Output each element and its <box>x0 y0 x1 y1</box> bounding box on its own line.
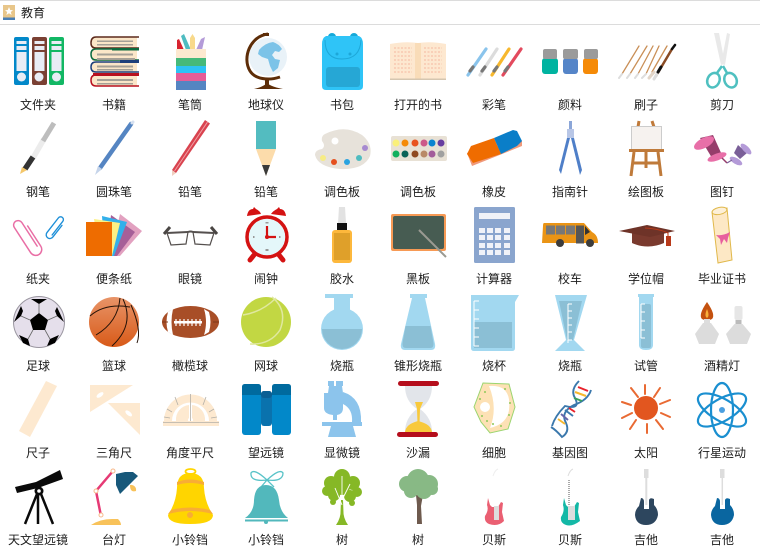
item: 贝斯 <box>482 469 506 547</box>
icon: paper clips <box>12 216 66 258</box>
item: 铅笔 <box>254 121 278 199</box>
item: 文件夹 <box>14 37 64 112</box>
item: 尺子 <box>19 381 57 460</box>
icon: measuring cylinder <box>555 295 587 351</box>
icon: yellow bell <box>168 469 213 524</box>
icon: test tube <box>638 294 654 350</box>
icon: alarm clock <box>247 207 287 260</box>
icon: microscope <box>322 381 362 437</box>
label: 烧瓶 <box>558 359 582 373</box>
item: 彩笔 <box>468 49 521 112</box>
label: 尺子 <box>26 446 50 460</box>
item: 橡皮 <box>467 130 522 199</box>
label: 篮球 <box>102 358 126 373</box>
icon: plant cell <box>474 383 515 433</box>
item: 锥形烧瓶 <box>394 294 442 373</box>
item: 酒精灯 <box>695 302 751 373</box>
item: 闹钟 <box>247 207 287 286</box>
icon: diploma scroll <box>711 206 732 263</box>
label: 橡皮 <box>482 185 506 199</box>
icon: conical flask <box>401 294 435 350</box>
item: 网球 <box>241 297 291 373</box>
label: 橄榄球 <box>172 358 208 373</box>
icon: sun <box>622 385 670 433</box>
icon: graduation cap <box>619 225 675 246</box>
label: 角度平尺 <box>166 445 214 460</box>
item: 调色板 <box>315 129 371 199</box>
icon: globe <box>247 33 287 89</box>
item: 调色板 <box>391 136 447 199</box>
icon: eraser <box>467 130 522 166</box>
icon: red pencil <box>172 120 210 176</box>
item: 刷子 <box>619 45 675 112</box>
item: 眼镜 <box>164 227 217 286</box>
label: 显微镜 <box>324 445 360 460</box>
icon: binoculars <box>242 384 291 435</box>
item: 试管 <box>634 294 658 373</box>
label: 台灯 <box>102 532 126 547</box>
label: 书包 <box>330 98 354 112</box>
icon: blue guitar <box>711 469 734 525</box>
item: 书包 <box>322 33 363 112</box>
label: 打开的书 <box>394 97 442 112</box>
item: 图钉 <box>692 133 753 199</box>
item: 打开的书 <box>390 42 446 112</box>
label: 刷子 <box>634 98 658 112</box>
icon: paint jars <box>542 49 598 74</box>
item: 地球仪 <box>247 33 287 112</box>
label: 钢笔 <box>26 184 50 199</box>
label: 网球 <box>254 359 278 373</box>
icon: calculator <box>474 207 515 263</box>
icon: blackboard <box>391 214 446 257</box>
icon: drafting compass <box>559 121 582 175</box>
item: 树 <box>322 469 362 547</box>
label: 剪刀 <box>710 97 734 112</box>
icon: round flask <box>321 294 363 350</box>
item: 校车 <box>542 223 598 286</box>
icon: backpack <box>322 33 363 90</box>
item: 计算器 <box>474 207 515 286</box>
item: 笔筒 <box>176 34 206 112</box>
item: 行星运动 <box>693 383 751 460</box>
label: 基因图 <box>552 446 588 460</box>
item: 足球 <box>14 296 64 373</box>
label: 彩笔 <box>482 97 506 112</box>
item: 望远镜 <box>242 384 291 460</box>
item: 颜料 <box>542 49 598 112</box>
label: 烧瓶 <box>330 359 354 373</box>
item: 细胞 <box>474 383 515 460</box>
item: 绘图板 <box>628 121 664 199</box>
item: 纸夹 <box>12 216 66 286</box>
icon: stack of books <box>91 37 139 86</box>
item: 烧瓶 <box>555 295 587 373</box>
label: 毕业证书 <box>698 272 746 286</box>
label: 树 <box>336 532 348 547</box>
label: 贝斯 <box>558 533 582 547</box>
label: 闹钟 <box>254 271 278 286</box>
label: 文件夹 <box>20 97 56 112</box>
label: 细胞 <box>482 446 506 460</box>
item: 太阳 <box>622 385 670 460</box>
icon: soccer ball <box>14 296 64 348</box>
icon: pink bass guitar <box>485 469 504 525</box>
label: 树 <box>412 532 424 547</box>
icon: ruler <box>19 381 57 437</box>
label: 黑板 <box>406 272 430 286</box>
item: 便条纸 <box>86 214 142 286</box>
icon: desk lamp <box>91 469 138 525</box>
item: 剪刀 <box>705 33 739 112</box>
icon: american football <box>162 306 219 338</box>
icon: open book <box>390 42 446 80</box>
icon: glue bottle <box>332 207 352 263</box>
icon: astronomical telescope <box>15 470 63 524</box>
icon: header star badge <box>3 5 15 20</box>
item: 胶水 <box>330 207 354 286</box>
icon: alcohol lamps <box>695 302 751 344</box>
icon: green tree <box>322 469 362 525</box>
icon: hourglass <box>397 381 439 437</box>
item: 小铃铛 <box>245 472 288 547</box>
item: 学位帽 <box>619 225 675 286</box>
icon: scissors <box>705 33 739 90</box>
item: 吉他 <box>710 469 734 547</box>
item: 指南针 <box>552 121 588 199</box>
item: 吉他 <box>634 469 658 547</box>
icon: pen holder <box>176 34 206 90</box>
icon: watercolor tray <box>391 136 447 161</box>
icon: DNA helix <box>551 381 591 437</box>
item: 天文望远镜 <box>8 470 68 547</box>
icon: brushes <box>619 45 675 79</box>
icon: colored pens <box>468 49 521 75</box>
icon: protractor <box>163 394 219 426</box>
label: 锥形烧瓶 <box>394 359 442 373</box>
label: 贝斯 <box>482 533 506 547</box>
label: 吉他 <box>710 533 734 547</box>
item: 基因图 <box>551 381 591 460</box>
label: 吉他 <box>634 533 658 547</box>
label: 望远镜 <box>248 445 284 460</box>
label: 铅笔 <box>178 184 202 199</box>
label: 便条纸 <box>96 272 132 286</box>
label: 沙漏 <box>406 446 430 460</box>
label: 酒精灯 <box>704 359 740 373</box>
header bar <box>0 0 760 25</box>
label: 试管 <box>634 358 658 373</box>
label: 颜料 <box>558 97 582 112</box>
icon: teal bell with bow <box>245 472 288 524</box>
icon: set squares <box>90 385 140 435</box>
icon: easel <box>629 121 664 176</box>
icon: fountain pen <box>20 123 54 174</box>
icon: sticky notes <box>86 214 142 256</box>
label: 调色板 <box>400 185 436 199</box>
icon: push pins <box>692 133 753 167</box>
label: 铅笔 <box>254 184 278 199</box>
item: 橄榄球 <box>162 306 219 373</box>
label: 调色板 <box>324 185 360 199</box>
label: 地球仪 <box>248 98 284 112</box>
icon: binders <box>14 37 64 85</box>
label: 三角尺 <box>96 446 132 460</box>
item: 篮球 <box>89 297 139 373</box>
label: 圆珠笔 <box>96 184 132 199</box>
item: 烧瓶 <box>321 294 363 373</box>
item: 小铃铛 <box>168 469 213 547</box>
icon: teal bass guitar <box>561 469 580 526</box>
item: 钢笔 <box>20 123 54 199</box>
item: 沙漏 <box>397 381 439 460</box>
icon: tennis ball <box>241 297 291 347</box>
label: 小铃铛 <box>248 532 284 547</box>
icon: oval palette <box>315 129 371 169</box>
item: 黑板 <box>391 214 446 286</box>
label: 书籍 <box>102 97 126 112</box>
icon: dark blue guitar <box>635 469 658 525</box>
label: 图钉 <box>710 185 734 199</box>
icon: teal pencil <box>256 121 276 176</box>
label: 校车 <box>558 271 582 286</box>
icon: ballpoint pen <box>95 122 133 175</box>
label: 太阳 <box>634 445 658 460</box>
item: 铅笔 <box>172 120 210 199</box>
label: 行星运动 <box>698 446 746 460</box>
label: 计算器 <box>476 271 512 286</box>
heading: 教育 <box>21 5 45 20</box>
icon: glasses <box>164 227 217 245</box>
item: 台灯 <box>91 469 138 547</box>
label: 天文望远镜 <box>8 532 68 547</box>
icon: school bus <box>542 223 598 247</box>
item: 显微镜 <box>322 381 362 460</box>
label: 眼镜 <box>178 271 202 286</box>
icon: atom orbits <box>693 383 751 437</box>
item: 贝斯 <box>558 469 582 547</box>
icon: beaker <box>471 295 519 351</box>
item: 圆珠笔 <box>95 122 133 199</box>
icon: broad tree <box>399 469 438 524</box>
item: 毕业证书 <box>698 206 746 286</box>
label: 小铃铛 <box>172 532 208 547</box>
label: 胶水 <box>330 271 354 286</box>
label: 学位帽 <box>628 271 664 286</box>
item: 角度平尺 <box>163 394 219 460</box>
item: 书籍 <box>91 37 139 112</box>
label: 指南针 <box>552 184 588 199</box>
label: 烧杯 <box>482 359 506 373</box>
label: 笔筒 <box>178 97 202 112</box>
item: 三角尺 <box>90 385 140 460</box>
item: 烧杯 <box>471 295 519 373</box>
item: 树 <box>399 469 438 547</box>
label: 绘图板 <box>628 184 664 199</box>
label: 足球 <box>26 359 50 373</box>
label: 纸夹 <box>26 272 50 286</box>
icon: basketball <box>89 297 139 347</box>
